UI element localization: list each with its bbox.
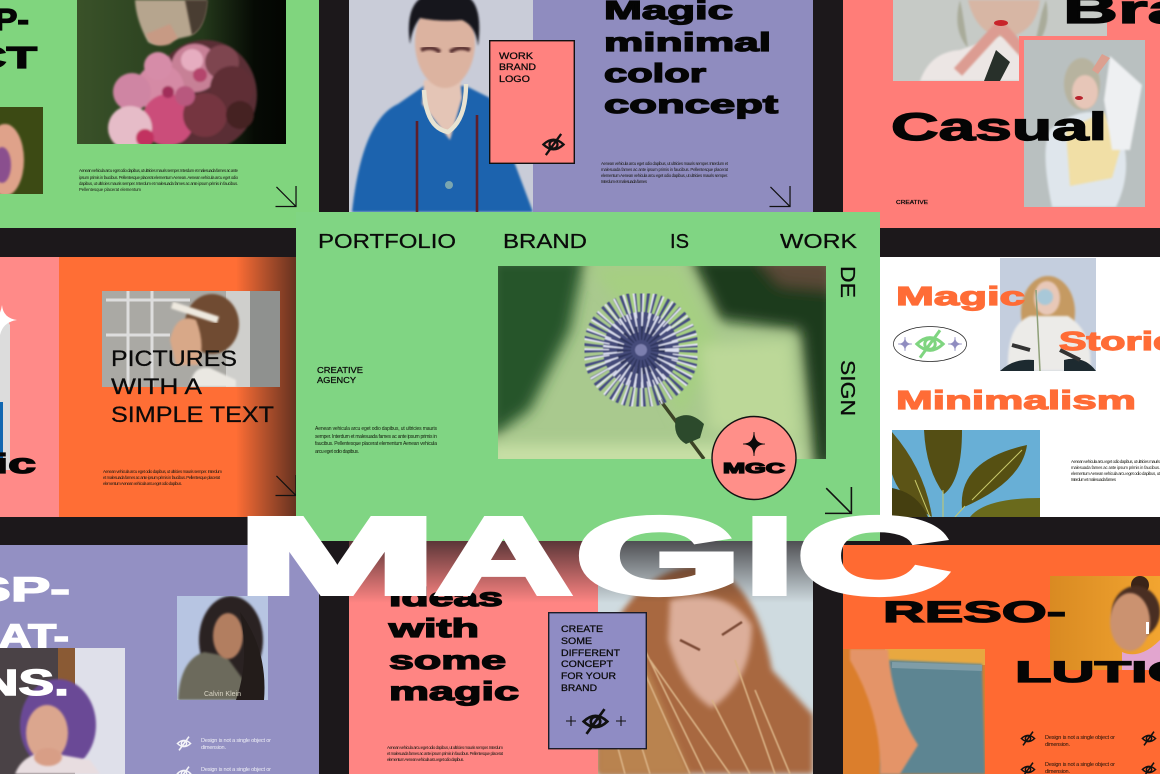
- vertical heading: de sign: SIGN: [836, 360, 858, 416]
- body text: Aenean vehicula arcu eget odio dapibus, ut ultricies mauris: [1071, 459, 1160, 464]
- label: callout text: [561, 624, 620, 693]
- heading row: portfolio brand is work: IS: [670, 231, 689, 253]
- icon: crossed eye: [543, 134, 564, 155]
- heading: cropped inspirations: [0, 571, 70, 656]
- body text: Aenean vehicula arcu eget odio dapibus, ut ultricies mauris semper. Interdum: [103, 469, 222, 474]
- label: creative: CREATIVE: [896, 200, 928, 206]
- heading: resolutions: LUTIONS: [1015, 656, 1160, 689]
- photo: hand in denim pocket: [843, 649, 985, 774]
- body text: [601, 161, 729, 184]
- photo: woman with long dark hair: Calvin Klein: [204, 691, 241, 698]
- panel: top centre purple slide: [349, 0, 813, 212]
- heading: ideas with some magic: some: [389, 645, 506, 675]
- heading: pictures with a simple text: SIMPLE TEXT: [111, 402, 274, 427]
- icon list: design notes: [1021, 732, 1156, 774]
- body text: elementum Aenean vehicula arcu eget odio dapibus, ut ultricies mauris semper.: [601, 173, 728, 178]
- heading row: portfolio brand is work: WORK: [780, 231, 858, 253]
- icon list: design notes: Design is not a single object or: [201, 738, 271, 744]
- body text: Pellentesque placerat elementum: [79, 187, 141, 192]
- body text: [79, 168, 239, 192]
- label: work brand logo: LOGO: [499, 74, 530, 84]
- heading: pictures with a simple text: [111, 346, 274, 427]
- heading row: portfolio brand is work: BRAND: [503, 231, 587, 253]
- icon list: design notes: Design is not a single object or: [1045, 762, 1115, 768]
- panel: bottom centre coral slide: [349, 541, 813, 774]
- panel: top right coral slide: [843, 0, 1160, 228]
- main title: MAGIC: I: [744, 496, 794, 618]
- body text: elementum Aenean vehicula arcu eget odio dapibus.: [387, 757, 464, 762]
- main title: MAGIC: M: [237, 496, 437, 618]
- label: work brand logo: WORK: [499, 51, 533, 61]
- heading: ideas with some magic: Ideas: [389, 582, 503, 612]
- body text: et malesuada fames ac ante ipsum primis in faucibus. Pellentesque placerat: [387, 751, 504, 756]
- body text: malesuada fames ac ante ipsum primis in faucibus. Pellentesque placerat: [601, 167, 729, 172]
- heading: casual: Casual: [891, 106, 1107, 149]
- photo: woman with purple hair: [0, 648, 125, 774]
- heading: resolutions: [883, 596, 1160, 689]
- body text: semper. Interdum et malesuada fames ac ante ipsum primis in: [315, 434, 437, 440]
- body text: elementum Aenean vehicula arcu eget odio dapibus.: [103, 481, 182, 486]
- icon: oval logo with crossed eye: [894, 326, 966, 362]
- heading row: portfolio brand is work: PORTFOLIO: [318, 231, 456, 253]
- body text: malesuada fames ac ante ipsum primis in faucibus.: [1071, 465, 1160, 470]
- body text: dapibus, ut ultricies mauris semper. Interdum et malesuada fames ac ante ipsum primis in faucibus.: [79, 181, 238, 186]
- icon list: design notes: Design is not a single object or: [201, 767, 271, 773]
- photo: woman with long dark hair: [177, 596, 268, 700]
- heading: ideas with some magic: with: [387, 613, 479, 643]
- body text: arcu eget odio dapibus.: [315, 449, 359, 455]
- body text: Interdum et malesuada fames: [1071, 477, 1116, 482]
- icon: four point star: [743, 432, 765, 456]
- icon list: design notes: Design is not a single object or: [1045, 735, 1115, 741]
- heading row: portfolio brand is work: [318, 231, 858, 253]
- main title: MAGIC: G: [575, 496, 742, 618]
- body text: ipsum primis in faucibus. Pellentesque placerat elementum Aenean. Aenean vehicula arcu eget odio: [79, 175, 239, 180]
- icon list: design notes: dimension.: [201, 745, 226, 751]
- photo: woman with floral headband: [102, 291, 280, 387]
- label: callout text: CONCEPT: [561, 659, 613, 669]
- heading: pictures with a simple text: WITH A: [111, 374, 202, 399]
- callout: create some different concept: [549, 613, 646, 749]
- arrow: [276, 475, 296, 496]
- photo: woman in blue blazer: [349, 0, 533, 212]
- label: creative agency: CREATIVE: [317, 365, 364, 375]
- label: work brand logo: [499, 51, 537, 84]
- vertical heading: de sign: DE: [836, 266, 858, 298]
- heading: ideas with some magic: [387, 582, 519, 706]
- main title: MAGIC: C: [796, 496, 950, 618]
- heading: magic minimal color concept: [604, 0, 779, 119]
- icon: stars and crossed eye: [566, 709, 626, 734]
- photo: cropped figure with star: [0, 305, 17, 470]
- heading: magic stories minimalism: Magic: [896, 281, 1025, 311]
- heading: pictures with a simple text: PICTURES: [111, 346, 237, 371]
- photo: green leaves on blue sky: [892, 430, 1040, 517]
- label: creative agency: [317, 365, 364, 385]
- photo: blonde woman with crossed fingers: [893, 0, 1107, 81]
- photo: hand holding flower: [0, 107, 43, 196]
- panel: bottom right orange slide: [843, 545, 1160, 774]
- vertical heading: de sign: [836, 266, 858, 416]
- label: work brand logo: BRAND: [499, 62, 537, 72]
- heading: magic minimal color concept: concept: [604, 89, 779, 119]
- panel: middle right white slide: [880, 257, 1160, 517]
- photo: woman with hair bun: [1050, 576, 1160, 670]
- body text: Interdum et malesuada fames: [601, 179, 647, 184]
- heading: resolutions: RESO-: [883, 596, 1066, 629]
- body text: et malesuada fames ac ante ipsum primis in faucibus. Pellentesque placerat: [103, 475, 221, 480]
- heading: magic stories minimalism: [896, 281, 1160, 415]
- body text: [315, 426, 438, 455]
- body text: [103, 469, 222, 486]
- label: callout text: DIFFERENT: [561, 648, 620, 658]
- shadow band: [349, 541, 813, 603]
- arrow: [770, 186, 790, 207]
- main title: MAGIC: A: [435, 496, 572, 618]
- photo: woman with peonies: [77, 0, 286, 150]
- body text: elementum Aenean vehicula arcu eget odio dapibus, ut: [1071, 471, 1160, 476]
- heading: magic minimal color concept: minimal: [604, 27, 771, 57]
- label: callout text: BRAND: [561, 683, 597, 693]
- badge: MGC: [712, 416, 796, 500]
- label: callout text: SOME: [561, 636, 592, 646]
- photo: woman in yellow vest: [1019, 36, 1145, 207]
- body text: Aenean vehicula arcu eget odio dapibus, ut ultricies mauris semper. Interdum et malesuada fames ac ante: [79, 168, 239, 173]
- label: creative agency: AGENCY: [317, 375, 357, 385]
- panel: centre green slide: [296, 212, 880, 541]
- heading: magic stories minimalism: Stories: [1059, 326, 1160, 356]
- body text: [1071, 459, 1160, 482]
- photo: woman holding flower: [1000, 258, 1096, 371]
- arrow: [825, 487, 851, 513]
- panel: top left green slide: [0, 0, 319, 228]
- arrow: [276, 186, 296, 207]
- label: callout text: FOR YOUR: [561, 671, 616, 681]
- heading: magic stories minimalism: Minimalism: [896, 385, 1136, 415]
- label: MGC: MGC: [723, 460, 785, 477]
- heading: ideas with some magic: magic: [389, 676, 519, 706]
- body text: Aenean vehicula arcu eget odio dapibus, ut ultricies mauris semper. Interdum et: [601, 161, 729, 166]
- icon list: design notes: [177, 737, 271, 774]
- body text: faucibus. Pellentesque placerat elementum Aenean vehicula: [315, 441, 437, 447]
- label: callout text: CREATE: [561, 624, 603, 634]
- panel: middle left orange slide: [0, 257, 296, 517]
- body text: Aenean vehicula arcu eget odio dapibus, ut ultricies mauris: [315, 426, 438, 432]
- body text: [387, 745, 504, 762]
- photo: woman with long red hair: [598, 541, 813, 774]
- body text: Aenean vehicula arcu eget odio dapibus, ut ultricies mauris semper. Interdum: [387, 745, 503, 750]
- icon list: design notes: dimension.: [1045, 742, 1070, 748]
- callout: work brand logo: [490, 41, 574, 163]
- heading: magic minimal color concept: color: [604, 58, 706, 88]
- photo: blue thistle flower: [498, 266, 826, 459]
- panel: bottom left purple slide: [0, 545, 319, 774]
